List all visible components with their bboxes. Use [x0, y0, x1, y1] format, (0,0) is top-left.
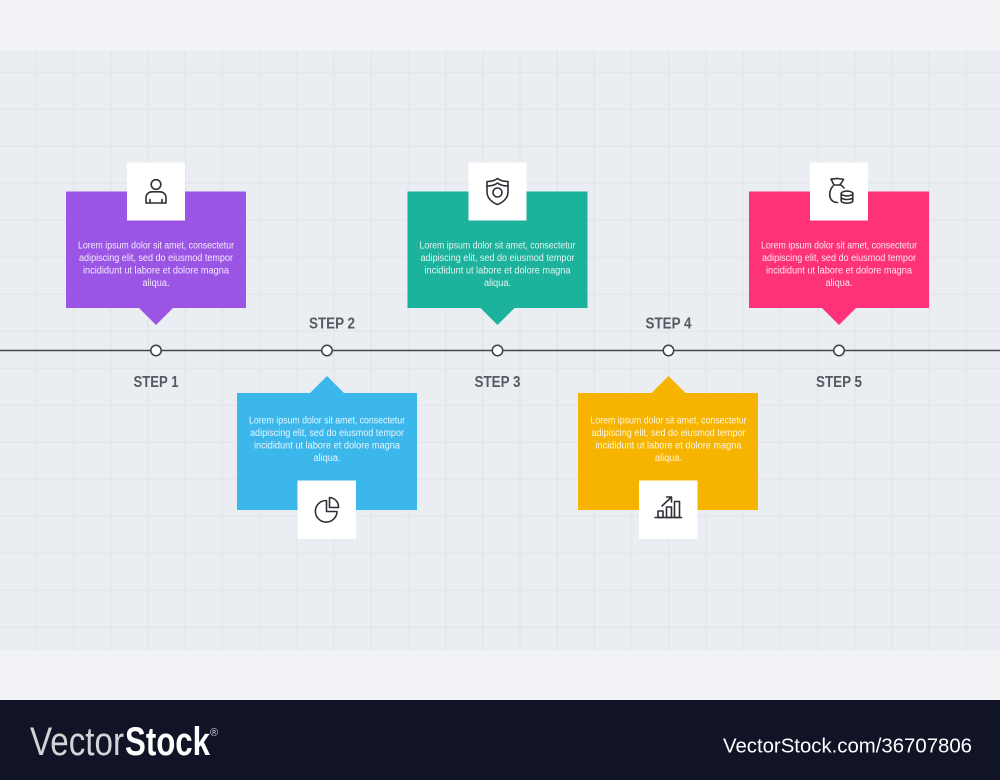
icon tile: growth chart [639, 480, 698, 539]
description text: Lorem ipsum dolor sit amet, consectetur [249, 416, 406, 426]
description text: aliqua. [314, 453, 340, 464]
description text [249, 416, 406, 464]
description text: incididunt ut labore et dolore magna [254, 440, 400, 452]
description text [590, 416, 747, 464]
grid background [0, 51, 1000, 650]
footer image id: VectorStock.com/36707806 [723, 736, 972, 758]
description text: Lorem ipsum dolor sit amet, consectetur [78, 240, 235, 252]
description text: aliqua. [655, 453, 682, 464]
description text: adipiscing elit, sed do eiusmod tempor [762, 253, 917, 264]
description text: incididunt ut labore et dolore magna [596, 440, 742, 452]
description text: Lorem ipsum dolor sit amet, consectetur [590, 416, 747, 426]
callout box blue [237, 376, 417, 510]
icon tile: pie chart [298, 480, 356, 539]
description text: adipiscing elit, sed do eiusmod tempor [420, 253, 575, 264]
panel: step 1 purple [66, 162, 246, 325]
footer logo [30, 720, 211, 764]
callout box yellow [578, 376, 758, 510]
label: step 4: STEP 4 [646, 316, 692, 332]
panel: step 5 pink [749, 162, 929, 325]
panel: step 3 green [408, 162, 588, 325]
callout box purple [66, 192, 246, 325]
label: step 3: STEP 3 [474, 374, 521, 391]
description text: adipiscing elit, sed do eiusmod tempor [79, 253, 234, 264]
description text: aliqua. [142, 278, 170, 289]
description text [78, 240, 235, 289]
label: step 1: STEP 1 [134, 374, 179, 391]
description text: incididunt ut labore et dolore magna [424, 266, 571, 276]
description text: aliqua. [826, 278, 852, 289]
icon tile: person [127, 162, 185, 220]
description text: incididunt ut labore et dolore magna [766, 266, 912, 276]
label: step 5: STEP 5 [816, 374, 862, 391]
callout box pink [749, 192, 929, 325]
icon tile: money bag and coins [810, 162, 868, 220]
label: step 2: STEP 2 [309, 316, 355, 332]
timeline markers [151, 345, 844, 356]
description text [761, 240, 918, 289]
description text [420, 240, 576, 289]
description text: adipiscing elit, sed do eiusmod tempor [250, 428, 405, 439]
registered mark: ® [210, 727, 218, 739]
panel: step 4 yellow [578, 376, 758, 539]
icon tile: shield [468, 162, 526, 220]
footer logo: Vector [30, 720, 124, 764]
description text: incididunt ut labore et dolore magna [83, 266, 229, 276]
footer logo: Stock [125, 720, 211, 764]
description text: adipiscing elit, sed do eiusmod tempor [592, 428, 746, 439]
footer bar [0, 700, 1000, 780]
panel: step 2 blue [237, 376, 417, 539]
description text: Lorem ipsum dolor sit amet, consectetur [420, 240, 576, 252]
timeline axis [0, 350, 1000, 352]
description text: aliqua. [484, 278, 511, 289]
callout box green [408, 192, 588, 325]
description text: Lorem ipsum dolor sit amet, consectetur [761, 240, 918, 252]
